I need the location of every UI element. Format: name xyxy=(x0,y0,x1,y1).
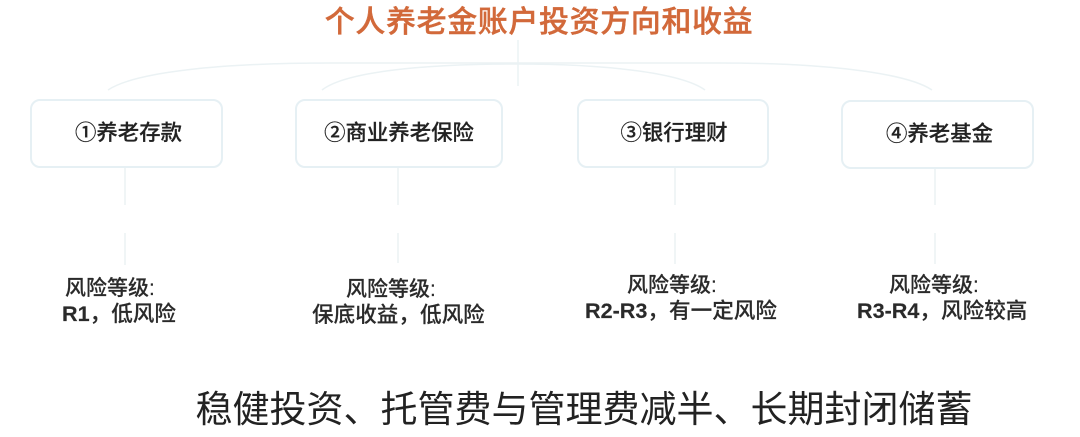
title: 个人养老金账户投资方向和收益 xyxy=(325,6,753,39)
box: pension fund xyxy=(841,100,1034,169)
risk text 3: R2-R3，有一定风险 xyxy=(585,298,777,323)
risk text 2: 保底收益，低风险 xyxy=(312,302,485,327)
risk text 4: R3-R4，风险较高 xyxy=(857,298,1027,323)
risk text 2 xyxy=(312,278,485,327)
box: bank wealth management: ③银行理财 xyxy=(621,121,727,145)
bottom summary: 稳健投资、托管费与管理费减半、长期封闭储蓄 xyxy=(196,389,972,430)
risk text 2: 风险等级: xyxy=(346,278,436,301)
risk text 3 xyxy=(585,274,777,323)
box: pension deposit: ①养老存款 xyxy=(75,121,182,145)
risk text 4: 风险等级: xyxy=(889,274,979,297)
risk text 4 xyxy=(857,274,1027,323)
risk text 1 xyxy=(62,276,176,326)
box: commercial pension insurance: ②商业养老保险 xyxy=(324,121,474,145)
box: pension fund: ④养老基金 xyxy=(886,122,993,146)
box: commercial pension insurance xyxy=(295,99,503,168)
risk text 3: 风险等级: xyxy=(627,274,717,297)
risk text 1: R1，低风险 xyxy=(62,301,176,326)
box: pension deposit xyxy=(30,99,223,168)
box: bank wealth management xyxy=(577,99,769,168)
risk text 1: 风险等级: xyxy=(65,277,155,300)
